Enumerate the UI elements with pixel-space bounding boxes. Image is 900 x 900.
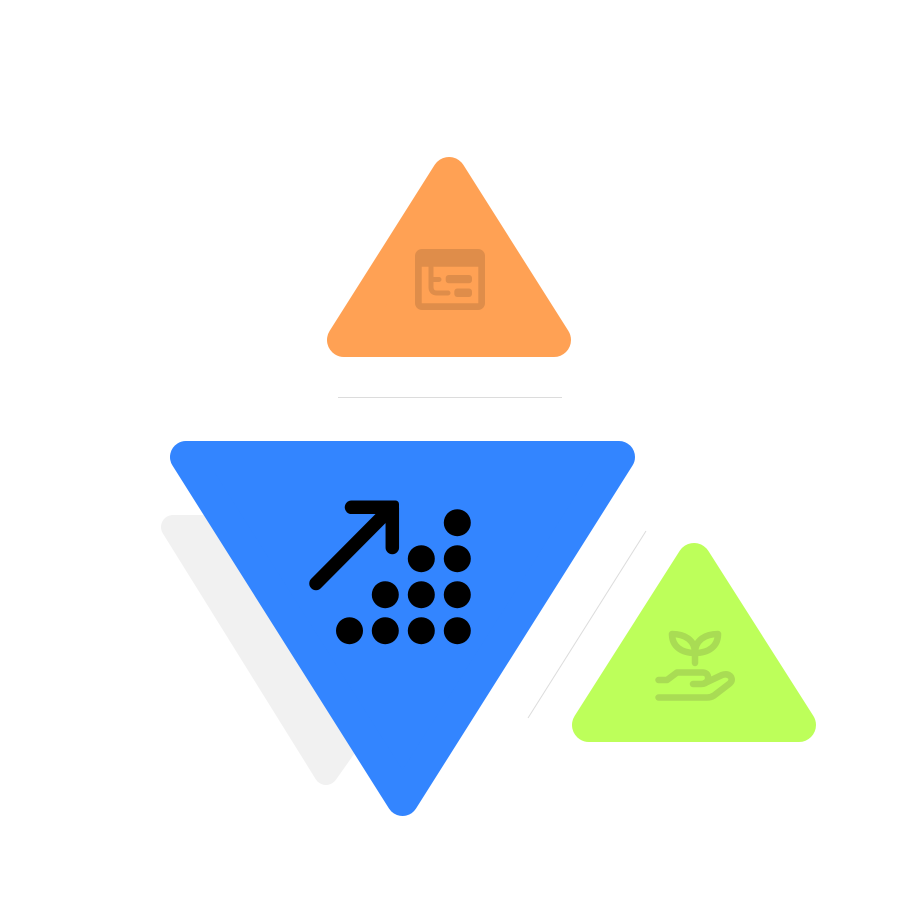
icon: hand holding plant bbox=[658, 634, 732, 698]
icon: growth arrow and dots bbox=[316, 504, 471, 644]
divider diagonal bbox=[528, 531, 646, 718]
panel: orange triangle bbox=[344, 174, 554, 340]
arrow bbox=[316, 504, 396, 584]
divider top bbox=[338, 396, 562, 398]
shadow triangle behind blue bbox=[173, 527, 500, 773]
panel: green triangle bbox=[589, 560, 799, 725]
panel: blue triangle bbox=[186, 457, 619, 800]
dot grid bbox=[336, 509, 471, 644]
icon: browser window with diagram bbox=[415, 249, 485, 310]
